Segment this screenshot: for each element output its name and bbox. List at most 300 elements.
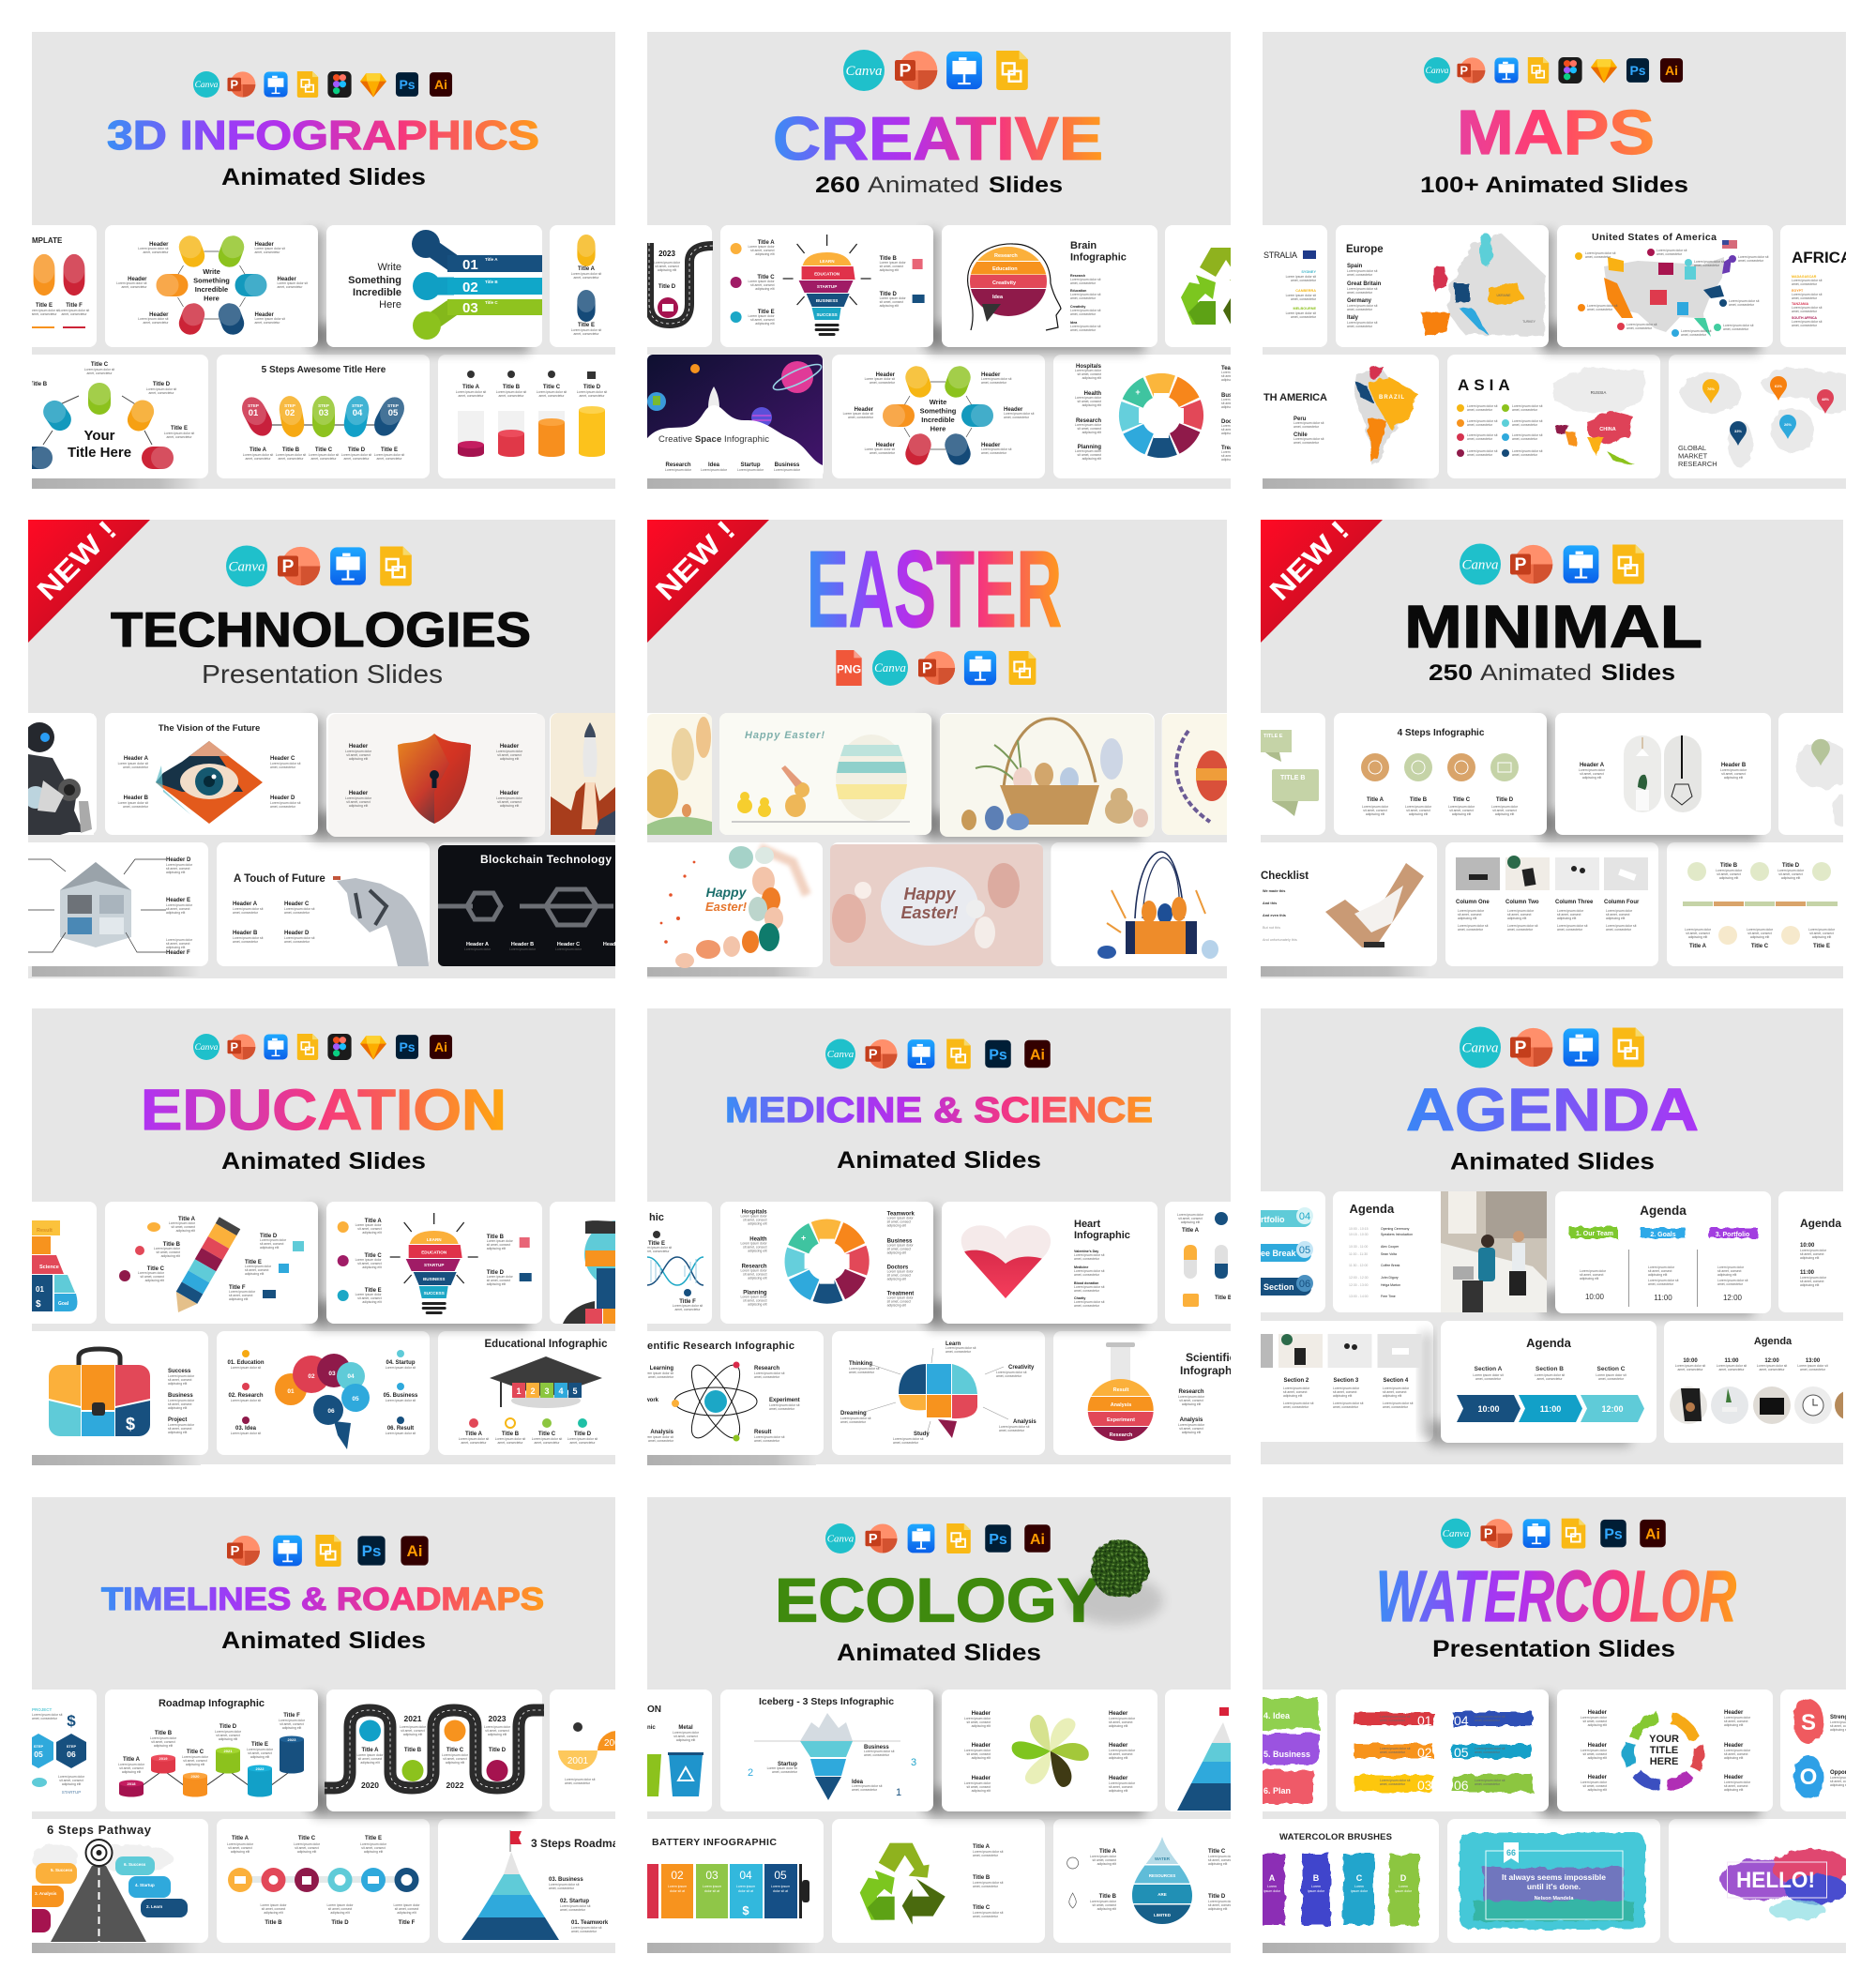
- slide: Europe map: Germany: [1347, 298, 1372, 304]
- slide: global market research: 76%: [1707, 386, 1715, 391]
- slide: DNA helix: Title F: [679, 1299, 696, 1305]
- slide: roadmap infographic: Title B: [155, 1731, 173, 1736]
- slide: circles timeline: Title A: [232, 1836, 250, 1841]
- slide cards background: [13, 1202, 644, 1465]
- slide: agenda with classroom photo: 13:00 - 14:00: [1349, 1295, 1369, 1298]
- slide: partial vertical pills: Title A: [578, 266, 596, 272]
- slide: science flask: Research: [1110, 1432, 1133, 1438]
- slide: timeline: Title B: [1720, 863, 1738, 869]
- app icons row: [825, 1039, 1051, 1069]
- slide: pencil: Title E: [245, 1260, 262, 1265]
- slide: watercolor brushes: D: [1400, 1873, 1407, 1883]
- slide: partial winding road: Title D: [658, 284, 676, 290]
- app icons row: Canva: [1461, 557, 1499, 572]
- slide: brush cycle: YOUR: [1649, 1734, 1679, 1745]
- slide: blockchain: Header A: [466, 942, 489, 947]
- slide: partial vertical pills: [571, 235, 601, 336]
- slide: watercolor brushes: Lorem: [1311, 1885, 1321, 1888]
- slide: cylinder bar chart: Title A: [462, 385, 480, 390]
- slide: partial agenda times: Agenda: [1800, 1217, 1841, 1230]
- slide: winding road timeline: 2023: [489, 1714, 507, 1723]
- slide: puzzle briefcase: Success: [168, 1369, 191, 1374]
- slide: brain infographic: [966, 240, 1127, 332]
- app icons row: P: [869, 1047, 878, 1062]
- slide: agenda three columns: 11:00: [1654, 1294, 1672, 1302]
- slide: hexagon steps: STEP: [34, 1744, 44, 1749]
- panel: Minimal: [1242, 515, 1873, 978]
- slide: four sections photos: [1261, 1334, 1422, 1409]
- slide: graduation cap: 1: [516, 1386, 522, 1396]
- slide: five steps: 02: [285, 408, 295, 418]
- slide: your title here arc: [21, 362, 194, 469]
- slide: agenda with classroom photo: Agenda: [1349, 1202, 1395, 1216]
- slide: DNA helix: Title E: [648, 1241, 665, 1247]
- slide: brain regions: 04: [347, 1373, 355, 1380]
- slide: clover petals: Header: [1109, 1776, 1128, 1781]
- slide: green speech boxes: TITLE E: [1263, 734, 1283, 739]
- app icons row: [1441, 1519, 1666, 1549]
- slide: battery infographic: 05: [774, 1869, 787, 1882]
- slide: DNA helix: [642, 1212, 704, 1311]
- slide: Europe map: Great Britain: [1347, 281, 1382, 287]
- app icons row: P: [282, 556, 295, 577]
- app icons row: Ai: [434, 77, 447, 92]
- slide: creative space: Business: [775, 462, 800, 468]
- slide: write something hexagon: [116, 233, 308, 338]
- slide cards background: [1244, 1690, 1875, 1953]
- slide: circles timeline: Title F: [399, 1920, 416, 1926]
- slide: water drop: WATER: [1155, 1856, 1171, 1861]
- slide: your title here arc: Your: [83, 428, 115, 444]
- slide: Europe map: Europe: [1346, 244, 1384, 255]
- slide: iceberg: 3: [911, 1757, 916, 1768]
- slide: brush bars: [1354, 1712, 1533, 1793]
- slide: brush cycle: HERE: [1650, 1756, 1678, 1767]
- slide: write something ribbons: Something: [348, 275, 401, 286]
- slide: pencil: Title A: [178, 1217, 196, 1222]
- slide: watercolor quote: Nelson Mandela: [1535, 1896, 1574, 1902]
- slide: water drop: Title D: [1208, 1894, 1226, 1900]
- slide: Europe map: Italy: [1347, 315, 1359, 321]
- app icons row: Canva: [874, 660, 906, 674]
- slide: hexagon steps: $: [67, 1712, 76, 1730]
- slide: brush cycle: [1581, 1710, 1751, 1792]
- slide: brain regions: Lorem ipsum dolor sit: [386, 1399, 416, 1402]
- slide: happy easter egg and chicks: Happy Easter!: [745, 730, 825, 741]
- slide: creative space: Research: [665, 462, 691, 468]
- slide: partial half circles timeline: [558, 1722, 637, 1785]
- slide: six steps pathway: 2. Learn: [146, 1904, 163, 1909]
- slide: agenda round photos: 11:00: [1724, 1358, 1739, 1364]
- slide: brain regions: Lorem ipsum dolor sit: [231, 1399, 261, 1402]
- slide: creative space: Idea: [708, 462, 720, 468]
- slide: iceberg: Business: [864, 1745, 889, 1750]
- slide: six steps pathway: 5. Success: [51, 1868, 73, 1872]
- slide: roadmap infographic: 2022: [256, 1766, 265, 1771]
- slide: five steps: Title D: [348, 447, 366, 453]
- slide cards background: [628, 1202, 1260, 1465]
- slide: brain regions: Lorem ipsum dolor sit: [231, 1432, 261, 1435]
- slide: capsules: [1177, 1212, 1233, 1307]
- slide: brain regions: 06. Result: [387, 1426, 414, 1432]
- slide: brush cycle: Header: [1588, 1743, 1608, 1749]
- slide: puzzle briefcase: Business: [168, 1393, 193, 1399]
- slide: pendant lamp photos: Header B: [1721, 763, 1747, 768]
- slide: your title here arc: Title E: [171, 426, 188, 432]
- slide: graduation cap: Title B: [502, 1432, 520, 1437]
- slide: SWOT brushes: O: [1800, 1765, 1817, 1790]
- slide: battery infographic: dolor sit at: [704, 1889, 719, 1893]
- title: EASTER: [807, 528, 1062, 650]
- slide: partial template pills: MPLATE: [32, 236, 63, 245]
- slide: brush labels: 5. Business: [1263, 1750, 1310, 1759]
- slide: agenda arrows: 10:00: [1477, 1404, 1500, 1414]
- slide: partial agenda times: 11:00: [1800, 1270, 1815, 1276]
- slide cards background: [1242, 1191, 1863, 1446]
- subtitle: Animated Slides: [1450, 1148, 1655, 1174]
- slide: partial template pills: [29, 236, 89, 328]
- slide: science flask: [1083, 1342, 1242, 1444]
- slide: agenda with classroom photo: 12:00 - 12:30: [1349, 1276, 1369, 1280]
- slide: vision of the future: Header A: [124, 756, 149, 762]
- app icons row: [843, 50, 1028, 91]
- slide: agenda three columns: 2. Goals: [1650, 1232, 1676, 1238]
- slide: pencil: Title C: [147, 1266, 165, 1272]
- slide: iceberg: 1: [896, 1787, 901, 1798]
- title: 3D INFOGRAPHICS: [107, 113, 539, 159]
- slide: timeline: Title A: [1689, 944, 1707, 949]
- app icons row: Canva: [195, 1043, 219, 1053]
- slide: puzzle brain: Study: [914, 1432, 930, 1437]
- slide: winding road timeline: Title A: [361, 1748, 379, 1753]
- slide: numbered sections: rtfolio: [1261, 1215, 1285, 1224]
- slide: brain regions: Lorem ipsum dolor sit: [386, 1366, 416, 1370]
- slide: checklist: [1261, 863, 1424, 947]
- slide: agenda arrows: Section A: [1475, 1366, 1503, 1372]
- slide: four sections photos: Section 3: [1334, 1378, 1359, 1384]
- subtitle: 100+ Animated Slides: [1420, 173, 1688, 198]
- app icons row: [836, 650, 1036, 686]
- slide: four sections photos: Section 2: [1283, 1378, 1309, 1384]
- slide: agenda arrows: Agenda: [1526, 1336, 1572, 1350]
- slide: five steps: 04: [353, 408, 363, 418]
- title: TIMELINES & ROADMAPS: [101, 1582, 544, 1617]
- slide: SWOT brushes: Opportunities: [1830, 1770, 1868, 1776]
- slide: partial Australia: CANBERRA: [1295, 289, 1316, 293]
- slide: blockchain: Lorem ipsum dolor: [555, 947, 582, 951]
- slide: battery infographic: dolor sit at: [773, 1889, 788, 1893]
- title: MINIMAL: [1404, 593, 1702, 660]
- slide: watercolor quote: 66: [1506, 1848, 1516, 1857]
- slide: pendant lamp photos: [1579, 735, 1747, 812]
- slide: global market research: 26%: [1784, 422, 1792, 427]
- slide: agenda with classroom photo: 12:30 - 13:00: [1349, 1283, 1369, 1287]
- app icons row: Canva: [1443, 1528, 1470, 1539]
- slide: science flask: Result: [1113, 1387, 1129, 1393]
- slide: happy easter wreath: Easter!: [705, 900, 748, 914]
- new ribbon: [28, 515, 150, 643]
- slide: agenda round photos: [1670, 1336, 1865, 1424]
- slide: hello splash: HELLO!: [1736, 1868, 1815, 1893]
- slide: four photo columns: Column Three: [1555, 900, 1594, 905]
- slide: blockchain: Lorem ipsum dolor: [464, 947, 492, 951]
- title: TECHNOLOGIES: [111, 603, 531, 658]
- slide: battery infographic: 03: [705, 1869, 719, 1882]
- slide: agenda three columns: 10:00: [1585, 1293, 1605, 1301]
- slide: roadmap infographic: [118, 1698, 306, 1797]
- slide: vision of the future: Header C: [270, 756, 295, 762]
- slide: partial vertical pills: Title E: [578, 323, 595, 328]
- subtitle: Presentation Slides: [202, 659, 443, 689]
- slide: South America map: BRAZIL: [1379, 395, 1405, 401]
- slide: puzzle briefcase: $: [126, 1415, 135, 1433]
- slide: six steps pathway: 4. Startup: [135, 1883, 155, 1887]
- slide: science flask: Research: [1178, 1389, 1204, 1395]
- slide: battery infographic: $: [742, 1903, 749, 1917]
- slide: partial winding road: [649, 243, 713, 324]
- app icons row: [226, 546, 412, 587]
- slide: science flask: Analysis: [1180, 1417, 1203, 1423]
- slide: brush cycle: Header: [1724, 1775, 1744, 1780]
- slide: watercolor brushes: C: [1356, 1873, 1363, 1883]
- slide: heart infographic: Medicine: [1074, 1265, 1088, 1269]
- slide: battery infographic: Lorem ipsum: [736, 1885, 755, 1888]
- new ribbon: [1261, 515, 1383, 643]
- slide: battery infographic: BATTERY INFOGRAPHIC: [652, 1837, 777, 1848]
- app icons row: Canva: [827, 1534, 855, 1545]
- subtitle: Animated: [1480, 660, 1592, 686]
- slide: your title here arc: Title D: [153, 382, 171, 387]
- slide: winding road timeline: 2020: [361, 1780, 379, 1790]
- slide: agenda with classroom photo: Free Time: [1381, 1295, 1396, 1298]
- slide: six steps pathway: 3. Analysis: [35, 1891, 57, 1896]
- slide: write something ribbons: Incredible: [353, 287, 401, 298]
- slide: agenda three columns: [1570, 1204, 1758, 1307]
- slide: agenda arrows: [1457, 1336, 1644, 1422]
- slide: agenda arrows: Section B: [1536, 1366, 1564, 1372]
- slide: Asia map: [1457, 368, 1645, 465]
- slide: brain infographic: Research: [1070, 274, 1085, 278]
- slide: creative space: [643, 355, 824, 478]
- slide: battery infographic: 02: [671, 1869, 684, 1882]
- slide: partial Africa: [1792, 251, 1846, 326]
- slide: watercolor brushes: Lorem: [1399, 1885, 1408, 1888]
- slide: checklist: We made this: [1263, 889, 1285, 893]
- slide: happy easter wreath: [638, 842, 823, 968]
- slide: touch of future: Header A: [233, 902, 258, 907]
- slide: numbered sections: Section: [1263, 1282, 1294, 1292]
- slide: Asia map: RUSSIA: [1591, 390, 1606, 395]
- app icons row: P: [1460, 63, 1468, 77]
- slide: roadmap infographic: Title C: [187, 1750, 204, 1755]
- subtitle: Slides: [1601, 660, 1675, 686]
- app icons row: [193, 71, 452, 98]
- slide: winding road timeline: 2022: [446, 1780, 464, 1790]
- app icons row: Canva: [228, 559, 265, 574]
- slide: partial agenda times: [1800, 1217, 1841, 1287]
- slide: watercolor brushes: WATERCOLOR BRUSHES: [1279, 1832, 1392, 1842]
- slide: recycle: Title B: [973, 1875, 991, 1881]
- slide: numbered sections: [1251, 1207, 1313, 1296]
- slide: scientific research atom: Learning: [650, 1366, 673, 1371]
- slide: roadmap infographic: Title D: [219, 1724, 237, 1730]
- slide: cylinder bar chart: [456, 371, 607, 457]
- app icons row: Ps: [1629, 63, 1646, 78]
- slide: circles timeline: Title C: [298, 1836, 316, 1841]
- slide: puzzle flask: 01: [36, 1285, 44, 1294]
- slide cards background: [628, 225, 1260, 489]
- subtitle: 250: [1429, 660, 1473, 686]
- slide: recycle: [860, 1843, 1003, 1925]
- slide: global market research: MARKET: [1678, 452, 1708, 460]
- slide: brain infographic: Idea: [992, 295, 1004, 300]
- slide: agenda arrows: 11:00: [1540, 1404, 1561, 1414]
- slide: South America map: Peru: [1294, 417, 1307, 422]
- subtitle: Slides: [989, 173, 1063, 198]
- app icons row: P: [231, 1543, 240, 1559]
- slide: heart infographic: Charity: [1074, 1296, 1085, 1300]
- slide: Europe map: Spain: [1347, 264, 1363, 269]
- slide: winding road timeline: 2021: [404, 1714, 422, 1723]
- app icons row: [193, 1034, 452, 1060]
- app icons row: Ps: [399, 1039, 416, 1054]
- app icons row: P: [1515, 1038, 1527, 1058]
- slide: five steps: STEP: [352, 403, 363, 408]
- slide: puzzle flask: Science: [39, 1265, 59, 1270]
- slide: timeline: Title D: [1782, 863, 1800, 869]
- title: ECOLOGY: [775, 1565, 1100, 1634]
- slide: partial agenda times: 10:00: [1800, 1243, 1815, 1249]
- slide: clover petals: Header: [1109, 1711, 1128, 1717]
- slide: brain regions: 02. Research: [228, 1393, 264, 1399]
- new ribbon: NEW !: [1264, 515, 1355, 607]
- slide: recycling bins: ON: [647, 1705, 661, 1715]
- slide: timeline: [1683, 862, 1838, 949]
- slide: brush cycle: Header: [1724, 1743, 1744, 1749]
- title: EDUCATION: [141, 1078, 507, 1142]
- slide: battery infographic: Lorem ipsum: [703, 1885, 721, 1888]
- slide: agenda with classroom photo: 11:00 - 11:30: [1349, 1252, 1368, 1256]
- slide: pencil: [119, 1217, 304, 1318]
- slide: puzzle flask: [32, 1220, 77, 1311]
- app icons row: P: [1515, 554, 1527, 575]
- slide: write something ribbons: 02: [462, 280, 478, 295]
- subtitle: [1429, 660, 1675, 686]
- app icons row: PNG: [837, 662, 861, 675]
- app icons row: Ps: [989, 1532, 1007, 1548]
- slide: five steps: STEP: [284, 403, 295, 408]
- panel: Easter: [628, 515, 1256, 978]
- slide: write something ribbons: Title C: [485, 300, 498, 305]
- slide: winding road timeline: [325, 1710, 544, 1790]
- app icons row: Ai: [1645, 1526, 1660, 1542]
- slide: scientific research atom: Teamwork: [631, 1398, 659, 1403]
- slide: agenda three columns: 1. Our Team: [1576, 1231, 1613, 1237]
- app icons row: Ai: [1030, 1047, 1045, 1063]
- slide: four photo columns: Column One: [1456, 900, 1490, 905]
- slide: watercolor brushes: B: [1313, 1873, 1320, 1883]
- slide: egg basket: [940, 714, 1154, 837]
- slide: six steps pathway: 6 Steps Pathway: [47, 1823, 152, 1837]
- slide: partial Australia: STRALIA: [1263, 250, 1297, 260]
- slide: four photo columns: Column Four: [1604, 900, 1640, 905]
- slide: Asia map: CHINA: [1599, 427, 1616, 432]
- slide: Europe map: UKRAINE: [1496, 294, 1511, 297]
- slide: brush bars: 01: [1417, 1713, 1432, 1728]
- slide: brush bars: 06: [1454, 1778, 1469, 1793]
- slide: brush cycle: Header: [1724, 1710, 1744, 1716]
- slide: watercolor brushes: [1259, 1832, 1419, 1925]
- slide: Europe map: [1346, 233, 1546, 337]
- slide: watercolor quote: until it's done.: [1527, 1882, 1581, 1891]
- slide: puzzle brain: Analysis: [1013, 1419, 1036, 1425]
- slide: creative space: Lorem ipsum dolor: [665, 468, 692, 472]
- slide: brush bars: 05: [1454, 1745, 1469, 1760]
- slide: global market research: 33%: [1734, 429, 1742, 433]
- slide: pencil: Title D: [260, 1234, 278, 1239]
- slide: SWOT brushes: [1793, 1699, 1868, 1798]
- slide: blockchain: [438, 845, 626, 966]
- slide: three steps roadmap mountain: 01. Teamwork: [571, 1920, 609, 1926]
- slide: brain regions: 05: [352, 1396, 359, 1402]
- slide: global market research: 61%: [1775, 384, 1782, 388]
- slide: scientific research atom: Experiment: [769, 1398, 800, 1403]
- slide: heart infographic: Blood donation: [1074, 1281, 1098, 1285]
- slide: winding road timeline: Title C: [446, 1748, 464, 1753]
- slide: partial half circles timeline: 2002: [604, 1738, 626, 1749]
- slide: happy easter egg and chicks: [719, 713, 931, 835]
- slide: checklist: But not this: [1263, 926, 1280, 930]
- slide: partial template pills: Title E: [36, 303, 53, 309]
- slide: watercolor brushes: Lorem: [1267, 1885, 1277, 1888]
- slide: brain infographic: Brain: [1070, 240, 1097, 251]
- slide: puzzle flask: Goal: [58, 1301, 69, 1307]
- slide: agenda with classroom photo: Sean Volta: [1381, 1252, 1397, 1256]
- panel: Creative: [628, 32, 1266, 489]
- slide: five steps: 03: [319, 408, 328, 418]
- title: CREATIVE: [773, 104, 1103, 173]
- slide: cylinder bar chart: Title B: [503, 385, 521, 390]
- slide: partial Australia: SYDNEY: [1301, 270, 1316, 274]
- title: AGENDA: [1406, 1076, 1699, 1144]
- slide: agenda with classroom photo: 10:00 - 10:15: [1349, 1227, 1369, 1231]
- slide: agenda arrows: Section C: [1597, 1366, 1626, 1372]
- slide: graduation cap: 2: [530, 1386, 536, 1396]
- slide: capsules: Title B: [1215, 1296, 1233, 1301]
- slide: circles timeline: Title B: [265, 1920, 282, 1926]
- slide: creative space: Lorem ipsum dolor: [774, 468, 801, 472]
- slide: watercolor brushes: ipsum dolor: [1395, 1889, 1413, 1893]
- slide: battery infographic: dolor sit at: [738, 1889, 753, 1893]
- slide: iceberg: 2: [748, 1767, 753, 1779]
- slide: watercolor brushes: ipsum dolor: [1351, 1889, 1369, 1893]
- slide: agenda with classroom photo: Speakers Introduction: [1381, 1233, 1413, 1236]
- slide: South America map: TH AMERICA: [1263, 392, 1327, 403]
- slide: circles timeline: Title E: [365, 1836, 382, 1841]
- slide: iceberg: Idea: [852, 1780, 864, 1785]
- slide: brain regions: 05. Business: [384, 1393, 418, 1399]
- slide: puzzle brain: [840, 1341, 1036, 1445]
- subtitle: Presentation Slides: [1432, 1636, 1675, 1662]
- slide: three steps roadmap mountain: [461, 1830, 626, 1940]
- slide: clover petals: Header: [972, 1776, 991, 1781]
- app icons row: Canva: [1426, 67, 1449, 76]
- slide: partial template pills: Title F: [66, 303, 83, 309]
- slide: green speech boxes: [1261, 730, 1319, 816]
- slide: agenda with classroom photo: John Digory: [1381, 1276, 1399, 1280]
- slide: four steps: Title A: [1367, 797, 1384, 803]
- slide cards background: [628, 1690, 1260, 1953]
